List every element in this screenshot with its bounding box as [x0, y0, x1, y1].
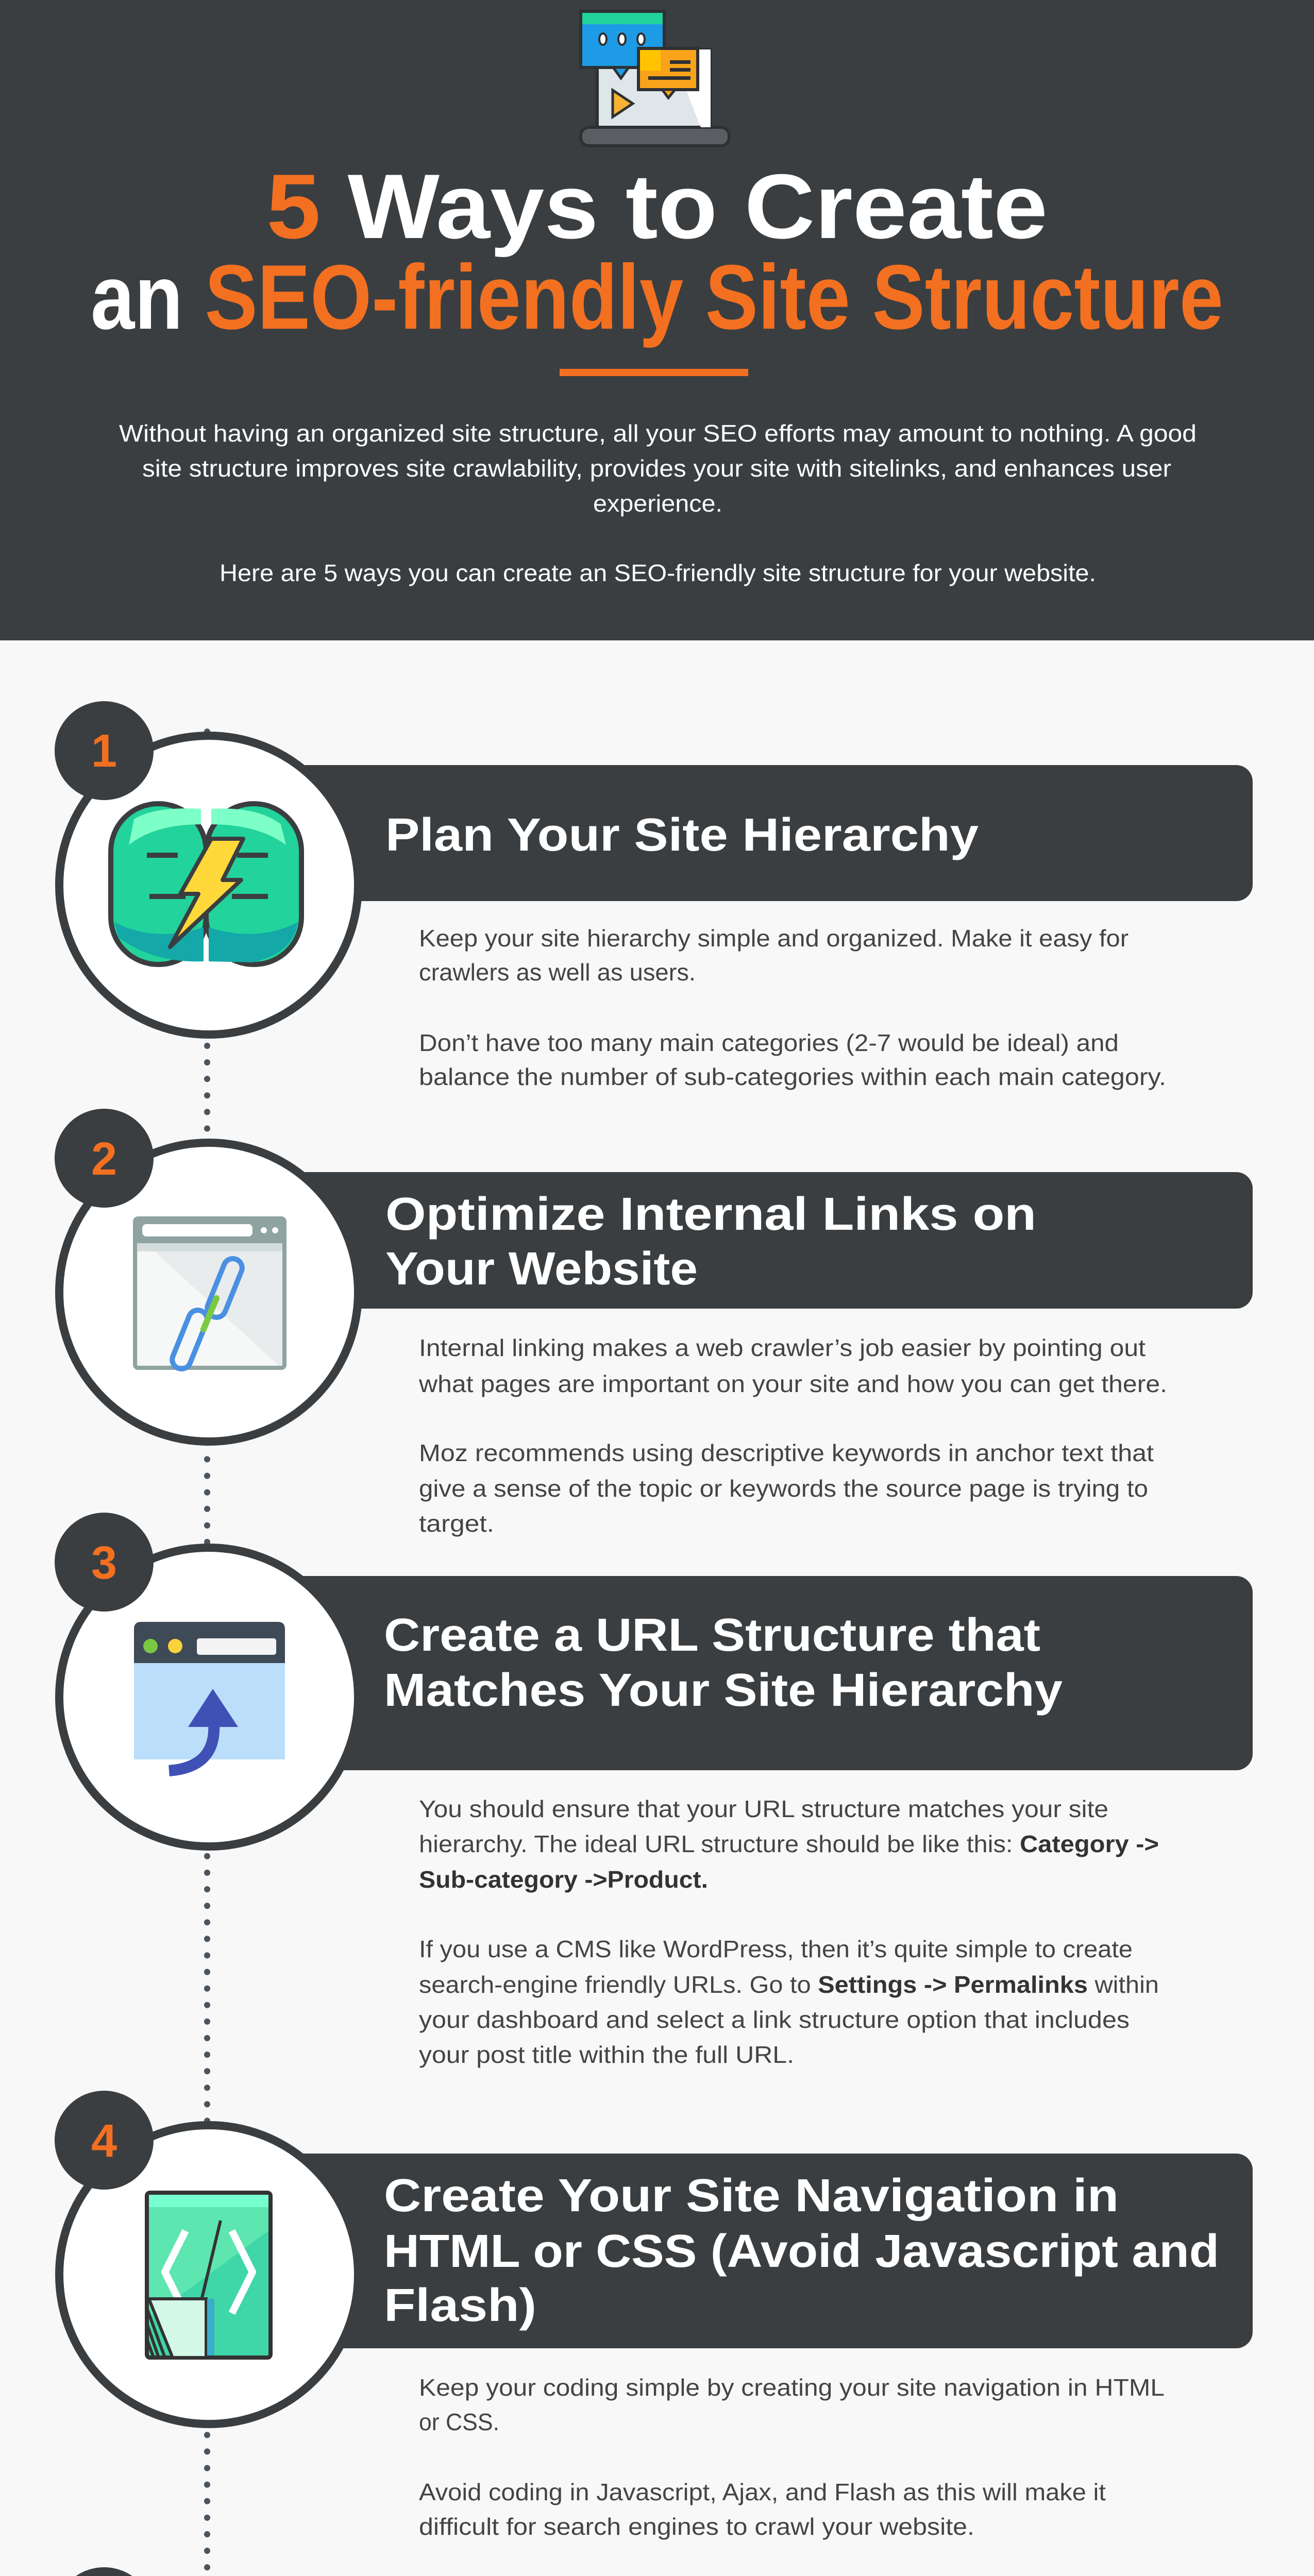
- body text 3: your dashboard and select a link structure option that includes: [419, 2006, 1130, 2033]
- section 1: plan hierarchy: [55, 701, 1253, 1090]
- heading bar 3: Create a URL Structure that: [384, 1609, 1040, 1661]
- body text 4: Keep your coding simple by creating your site navigation in HTML: [419, 2374, 1165, 2401]
- icon: browser with link: [135, 1218, 284, 1371]
- intro text: experience.: [593, 490, 722, 517]
- number 1: [55, 701, 154, 800]
- icon: code document: [147, 2193, 271, 2358]
- body text 3: search-engine friendly URLs. Go to Settings -> Permalinks within: [419, 1971, 1159, 1998]
- icon: browser with up arrow: [134, 1622, 285, 1771]
- body text 3: Sub-category ->Product.: [419, 1866, 708, 1893]
- body text 1: crawlers as well as users.: [419, 959, 696, 986]
- intro text: [119, 420, 1197, 586]
- title: [91, 155, 1223, 348]
- intro text: Here are 5 ways you can create an SEO-friendly site structure for your website.: [220, 560, 1096, 586]
- body text 3: your post title within the full URL.: [419, 2041, 794, 2068]
- number 4: [55, 2091, 154, 2190]
- body text 1: Keep your site hierarchy simple and organized. Make it easy for: [419, 925, 1128, 952]
- number 2: 2: [91, 1133, 117, 1185]
- heading bar 4: HTML or CSS (Avoid Javascript and: [384, 2226, 1219, 2277]
- icon: brain with lightning: [111, 804, 301, 964]
- body text 2: give a sense of the topic or keywords the source page is trying to: [419, 1475, 1148, 1502]
- body text 1: balance the number of sub-categories within each main category.: [419, 1063, 1166, 1090]
- body text 3: [419, 1795, 1159, 2068]
- body text 1: [419, 925, 1166, 1090]
- body text 2: Internal linking makes a web crawler’s job easier by pointing out: [419, 1334, 1145, 1361]
- number 2: [55, 1109, 154, 1208]
- heading bar 3: [258, 1576, 1253, 1770]
- body text 3: hierarchy. The ideal URL structure should be like this: Category ->: [419, 1831, 1159, 1857]
- number 3: 3: [91, 1537, 117, 1589]
- intro text: site structure improves site crawlability, provides your site with sitelinks, and enhances user: [142, 455, 1171, 482]
- body text 3: If you use a CMS like WordPress, then it’s quite simple to create: [419, 1936, 1133, 1962]
- heading bar 2: [258, 1172, 1253, 1309]
- body text 3: You should ensure that your URL structure matches your site: [419, 1795, 1108, 1822]
- body text 4: or CSS.: [419, 2409, 499, 2435]
- heading bar 4: [258, 2154, 1253, 2348]
- header panel: [0, 0, 1314, 640]
- heading bar 4: Flash): [384, 2280, 536, 2331]
- title: 5 Ways to Create: [266, 155, 1048, 258]
- number 3: [55, 1513, 154, 1612]
- body text 2: what pages are important on your site and how you can get there.: [418, 1370, 1167, 1397]
- body text 2: Moz recommends using descriptive keywords in anchor text that: [419, 1439, 1154, 1466]
- icon: chat device: [581, 11, 729, 146]
- section 5: shallow depth: [55, 2567, 1253, 2576]
- heading bar 3: Matches Your Site Hierarchy: [384, 1665, 1063, 1716]
- heading bar 4: Create Your Site Navigation in: [384, 2170, 1119, 2222]
- number 5: [55, 2567, 154, 2576]
- body text 2: target.: [419, 1510, 494, 1537]
- body text 4: difficult for search engines to crawl your website.: [419, 2513, 974, 2540]
- intro text: Without having an organized site structure, all your SEO efforts may amount to nothing. A good: [119, 420, 1197, 447]
- heading bar 1: Plan Your Site Hierarchy: [385, 809, 979, 861]
- body text 4: [419, 2374, 1165, 2540]
- heading bar 2: Optimize Internal Links on: [385, 1189, 1036, 1240]
- body text 2: [418, 1334, 1167, 1537]
- heading bar 2: Your Website: [385, 1243, 698, 1295]
- heading bar 1: [258, 765, 1253, 901]
- section 3: URL structure: [55, 1513, 1253, 2068]
- body text 1: Don’t have too many main categories (2-7 would be ideal) and: [419, 1029, 1119, 1056]
- number 4: 4: [91, 2115, 117, 2167]
- section 4: HTML/CSS navigation: [55, 2091, 1253, 2540]
- body text 4: Avoid coding in Javascript, Ajax, and Flash as this will make it: [419, 2479, 1106, 2505]
- number 1: 1: [91, 725, 117, 777]
- section 2: internal links: [55, 1109, 1253, 1537]
